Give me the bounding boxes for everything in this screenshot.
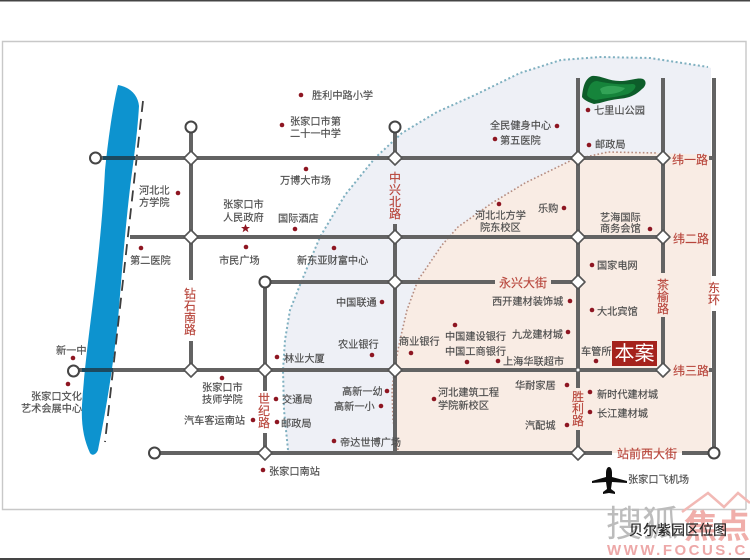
railway: dashed line	[105, 101, 143, 442]
place labels: east: 国家电网	[597, 259, 638, 272]
place labels: centre: 林业大厦	[284, 352, 325, 365]
place labels: centre: 中国联通	[336, 296, 377, 309]
road ends: circles	[68, 122, 720, 458]
place labels: west: 艺术会展中心	[21, 402, 82, 415]
road labels: 胜	[572, 389, 584, 404]
caption: 贝尔紫园区位图	[629, 522, 727, 538]
watermark: WWW.FOCUS.C	[607, 542, 748, 559]
place labels: east: 华耐家居	[515, 379, 556, 392]
place labels: west: 国际酒店	[278, 212, 319, 225]
place labels: centre: 帝达世博广场	[340, 436, 401, 449]
road labels: 纬一路	[672, 152, 708, 167]
place labels: east	[475, 105, 658, 432]
place labels: west: 张家口市第	[290, 115, 341, 128]
road labels: 路	[258, 415, 270, 430]
place labels: centre: 高新一小	[334, 400, 375, 413]
airport: plane icon and label: 张家口飞机场	[628, 473, 689, 486]
place labels: west: 张家口市	[202, 381, 243, 394]
road labels: 纬二路	[673, 231, 709, 246]
place labels: west: 人民政府	[223, 211, 264, 224]
watermark	[606, 493, 750, 559]
zone: blue inner district	[283, 57, 711, 453]
place labels: west: 汽车客运南站	[184, 414, 245, 427]
place labels: west: 技师学院	[202, 393, 243, 406]
place labels: east: 长江建材城	[597, 407, 648, 420]
place labels: west: 胜利中路小学	[312, 89, 373, 102]
river	[82, 85, 139, 455]
place labels: centre	[261, 296, 506, 478]
road nodes: diamonds	[184, 151, 670, 460]
place labels: centre: 学院新校区	[438, 399, 489, 412]
place labels: west: 万博大市场	[280, 174, 331, 187]
place labels: west: 新一中	[56, 344, 87, 357]
place labels: west	[21, 89, 373, 427]
place labels: centre: 中国建设银行	[445, 330, 506, 343]
place labels: east: 车管所	[581, 345, 612, 358]
place labels: east: 艺海国际	[600, 211, 641, 224]
road labels: 中	[389, 170, 401, 185]
road labels: 利	[572, 402, 584, 416]
place labels: east: 乐购	[538, 202, 558, 215]
road labels: 路	[657, 301, 669, 316]
road labels: 榆	[657, 289, 669, 304]
road labels: 纪	[258, 404, 270, 418]
place labels: east: 七里山公园	[594, 105, 645, 117]
place labels: west: 新东亚财富中心	[297, 254, 368, 267]
place labels: west: 河北北	[139, 185, 170, 197]
place labels: east: 大北宾馆	[597, 305, 638, 318]
place labels: east: 汽配城	[525, 419, 556, 432]
watermark: 搜狐	[606, 503, 678, 544]
road labels	[184, 152, 720, 461]
road labels: 永兴大街	[499, 276, 547, 290]
place labels: west: 第二医院	[130, 254, 171, 267]
place labels: east: 第五医院	[500, 134, 541, 147]
place labels: centre: 交通局	[282, 393, 313, 406]
zone: pink core district	[392, 152, 711, 453]
road labels: 石	[184, 299, 196, 313]
project marker: 本案	[614, 342, 654, 365]
road labels: 钻	[184, 286, 196, 301]
place labels: east: 新时代建材城	[597, 388, 658, 401]
road labels: 兴	[389, 183, 401, 197]
place labels: west: 张家口文化	[31, 390, 82, 403]
place labels: centre: 商业银行	[399, 335, 440, 348]
road labels: 路	[389, 206, 401, 221]
place labels: west: 张家口市	[223, 198, 264, 211]
zone boundary: pink dotted arc	[392, 152, 658, 450]
road labels: 北	[389, 195, 401, 209]
zone boundary: blue dotted arc	[283, 57, 708, 450]
place labels: centre: 高新一幼	[342, 385, 383, 398]
place labels: east: 全民健身中心	[490, 119, 551, 132]
place labels: east: 商务会馆	[600, 222, 641, 235]
park: green hill	[582, 76, 646, 104]
road labels: 世	[258, 392, 270, 406]
road labels: 路	[572, 413, 584, 428]
road labels: 东	[708, 281, 720, 295]
place labels: centre: 农业银行	[338, 338, 379, 351]
place labels: centre: 中国工商银行	[445, 345, 506, 358]
road labels: 纬三路	[673, 363, 709, 378]
place labels: east: 上海华联超市	[503, 355, 564, 368]
road crossing the river	[82, 158, 135, 370]
road network	[73, 78, 714, 453]
place labels: west: 市民广场	[219, 254, 260, 267]
road labels: 站前西大街	[617, 446, 677, 461]
place labels: west: 方学院	[139, 196, 170, 209]
airport: plane icon and label	[592, 467, 689, 494]
place labels: east: 西开建材装饰城	[492, 295, 563, 308]
place labels: east: 邮政局	[595, 138, 626, 151]
place labels: centre: 邮政局	[281, 417, 312, 430]
place labels: east: 九龙建材城	[512, 328, 563, 341]
watermark: 焦点	[684, 508, 750, 545]
road labels: 茶	[657, 277, 669, 292]
place labels: west: 二十一中学	[290, 127, 341, 140]
road labels: 路	[184, 322, 196, 337]
road labels: 南	[184, 310, 196, 325]
place labels: centre: 河北建筑工程	[438, 386, 499, 399]
place labels: centre: 张家口南站	[269, 465, 320, 478]
place labels: east: 院东校区	[480, 221, 521, 234]
road labels: 环	[708, 293, 720, 307]
place labels: east: 河北北方学	[475, 209, 526, 222]
